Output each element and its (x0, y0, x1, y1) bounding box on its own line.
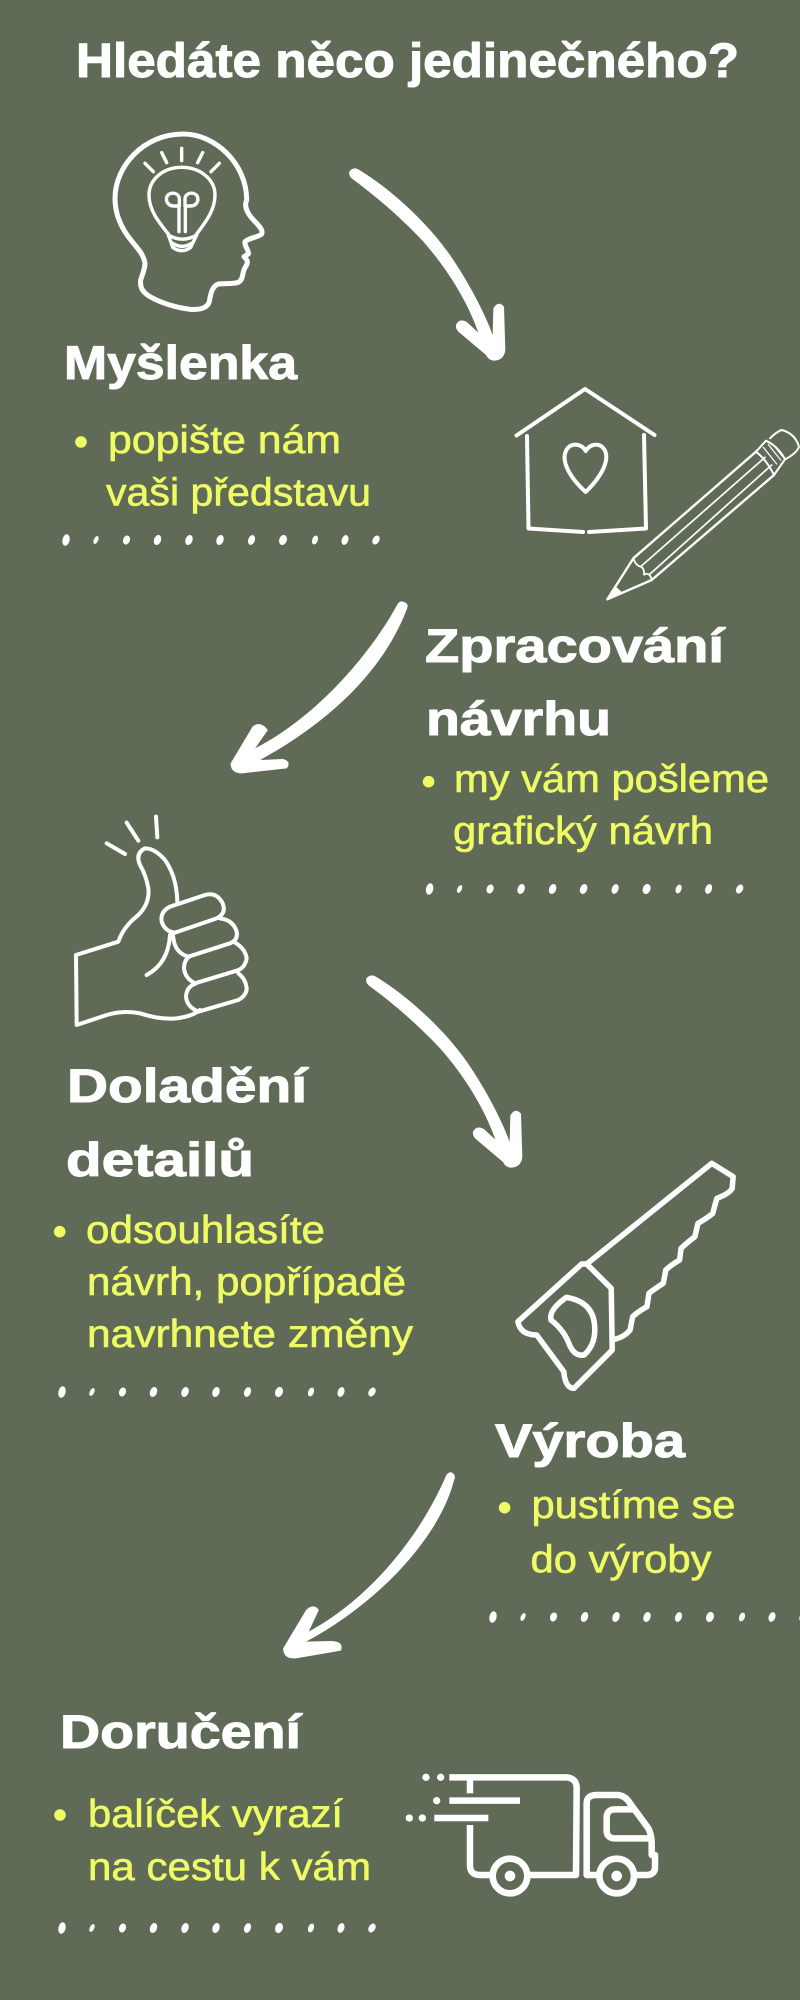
text block (88, 1793, 371, 1889)
text block: my vám pošleme (454, 758, 769, 801)
arrow 3 (366, 975, 522, 1168)
text block (453, 758, 769, 853)
text block: na cestu k vám (88, 1846, 371, 1889)
panel: Doručení (54, 1706, 655, 1934)
dotted separator (57, 1922, 377, 1934)
text block: do výroby (530, 1538, 712, 1582)
icon: thumbs up (76, 817, 247, 1025)
arrow 4 (283, 1472, 455, 1658)
heading: Doručení (60, 1706, 303, 1759)
arrow 1 (349, 168, 505, 361)
heading: Myšlenka (64, 337, 298, 390)
panel: Zpracování návrhu (423, 389, 799, 895)
arrow 2 (231, 601, 408, 773)
bullet (54, 1226, 66, 1237)
panel: Výroba (488, 1163, 800, 1623)
bullet (75, 436, 87, 448)
heading (66, 1060, 309, 1187)
dotted separator (57, 1386, 377, 1398)
dotted separator (425, 883, 745, 895)
text block (86, 1209, 414, 1356)
text block: balíček vyrazí (88, 1793, 343, 1836)
bullet (54, 1809, 66, 1821)
icon: head with light bulb (115, 134, 262, 309)
dotted separator (488, 1611, 800, 1623)
heading: návrhu (426, 693, 611, 746)
title: Hledáte něco jedinečného? (76, 35, 739, 88)
panel: Myšlenka (61, 134, 381, 546)
text block: návrh, popřípadě (87, 1261, 406, 1304)
icon: house with heart (516, 389, 654, 532)
text block (530, 1484, 736, 1582)
heading: Zpracování (425, 620, 726, 673)
text block: navrhnete změny (87, 1313, 414, 1356)
text block: grafický návrh (453, 810, 713, 853)
text block: vaši představu (106, 472, 371, 514)
text block: odsouhlasíte (86, 1209, 325, 1252)
text block (106, 419, 371, 514)
heading: Výroba (495, 1415, 686, 1468)
heading (425, 620, 726, 746)
bullet (499, 1502, 510, 1513)
heading: Doladění (67, 1060, 309, 1113)
bullet (423, 776, 434, 788)
text block: popište nám (108, 419, 341, 462)
panel: Doladění detailů (54, 817, 414, 1398)
icon: hand saw (518, 1163, 733, 1388)
icon: pencil (607, 430, 799, 599)
dotted separator (61, 534, 381, 546)
text block: pustíme se (532, 1484, 736, 1527)
heading: detailů (66, 1134, 254, 1187)
icon: delivery truck (406, 1774, 655, 1893)
